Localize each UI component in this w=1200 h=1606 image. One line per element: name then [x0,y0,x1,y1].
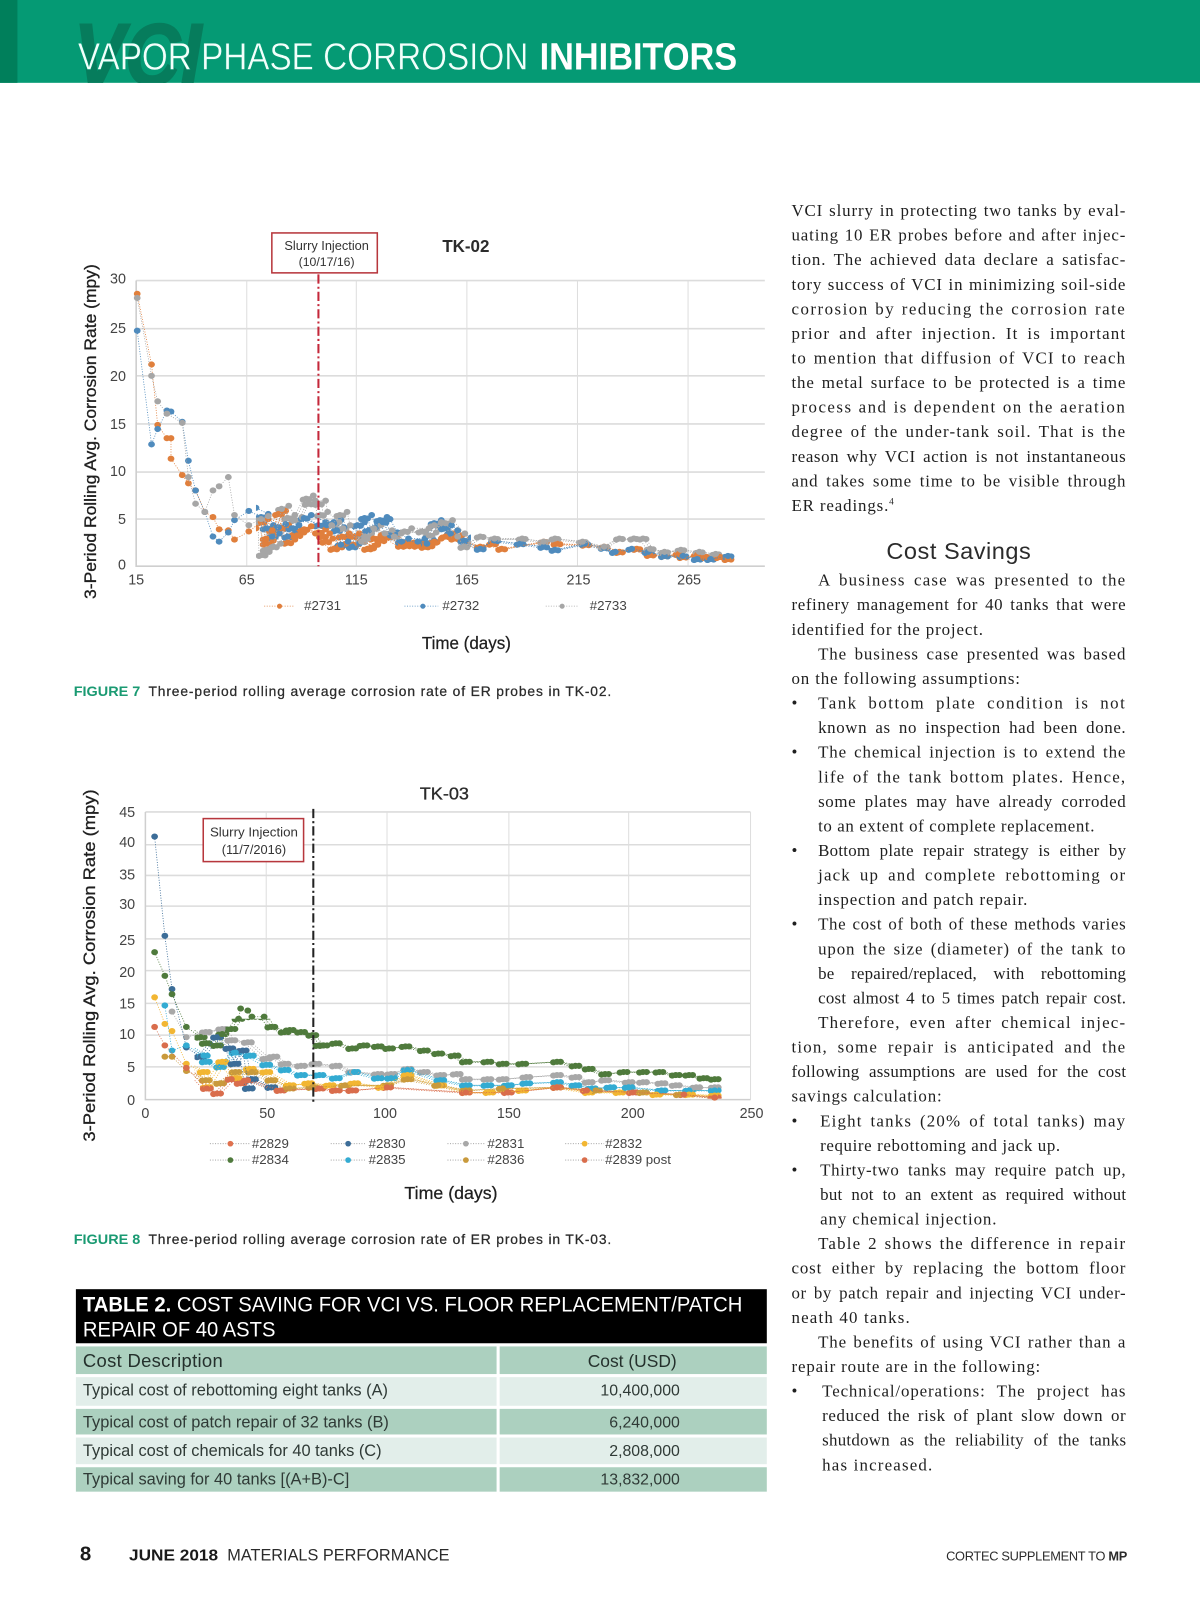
paragraphs: cost savings body: Eight tanks (20% of total tanks) may [820,1111,1126,1130]
paragraphs: cost savings body: The business case presented was based [818,644,1126,663]
series #2731 [137,294,728,559]
paragraphs: cost savings body: jack up and complete rebottoming or [818,865,1126,885]
paragraphs: cost savings body: tion, some repair is anticipated and the [791,1037,1126,1057]
x axis ticks: 250 [740,1106,764,1122]
series #2836 [165,1057,715,1098]
x axis ticks: 200 [621,1106,645,1122]
paragraphs: cost savings body: • [791,1381,798,1401]
caption: figure 7: Three-period rolling average corrosion rate of ER probes in TK-02. [148,683,611,699]
paragraph: VCI evaluation: process and is dependent on the aeration [791,397,1126,417]
header row: Cost Description [83,1350,223,1370]
paragraphs: cost savings body: • [791,1111,799,1130]
paragraphs: cost savings body: Technical/operations: The project has [822,1381,1126,1401]
paragraphs: cost savings body: any chemical injection. [820,1209,997,1229]
table heading: REPAIR OF 40 ASTS [83,1319,275,1342]
y axis ticks: 15 [119,997,135,1013]
magazine name: MATERIALS PERFORMANCE [227,1546,450,1564]
paragraphs: cost savings body: • [791,1160,798,1180]
paragraphs: cost savings body: neath 40 tanks. [791,1308,911,1327]
paragraphs: cost savings body: • [791,742,798,762]
y axis ticks: 35 [119,868,135,884]
header banner: VAPOR PHASE CORROSION [78,37,528,79]
header banner: INHIBITORS [540,37,737,79]
y axis ticks: 0 [118,557,126,573]
x axis title: Time (days) [422,633,511,653]
legend: #2836 [487,1152,524,1167]
paragraphs: cost savings body: A business case was presented to the [818,570,1126,590]
y axis ticks: 20 [119,965,135,981]
series #2832 [155,997,715,1096]
y axis ticks: 0 [127,1093,135,1109]
y axis ticks: 10 [110,464,126,480]
caption: figure 7: FIGURE 7 [74,683,141,699]
paragraphs: cost savings body: • [791,914,798,934]
caption: figure 8: FIGURE 8 [74,1231,141,1247]
x axis ticks: 265 [677,573,701,589]
y axis ticks: 25 [110,321,126,337]
series #2830 [155,837,271,1088]
callout: slurry injection [203,819,304,862]
paragraphs: cost savings body: has increased. [822,1455,933,1474]
paragraph: VCI evaluation: tion. The achieved data declare a satisfac- [791,250,1126,269]
paragraphs: cost savings body: require rebottoming and jack up. [820,1135,1061,1155]
table heading [76,1289,767,1344]
legend: #2834 [252,1152,289,1167]
legend: #2831 [487,1136,524,1151]
row: chemicals [83,1442,680,1460]
callout: slurry injection: Slurry Injection [210,825,298,840]
y axis ticks: 25 [119,933,135,949]
paragraphs: cost savings body: to an extent of complete replacement. [818,816,1095,835]
series #2829 and #2839 post [155,1027,715,1098]
chart: TK-03 corrosion rate [81,784,764,1203]
chart title: TK-03 [420,784,469,804]
supplement credit: CORTEC SUPPLEMENT TO MP [946,1548,1128,1563]
paragraph: VCI evaluation: to mention that diffusion of VCI to reach [791,348,1126,368]
paragraphs: cost savings body: Thirty-two tanks may require patch up, [820,1160,1126,1180]
x axis ticks: 0 [141,1106,149,1122]
row: saving: Typical saving for 40 tanks [(A+B)-C] [83,1471,349,1488]
table 2: cost saving [76,1289,767,1492]
x axis ticks: 100 [373,1106,397,1122]
paragraphs: cost savings body: identified for the project. [791,619,984,639]
paragraphs: cost savings body: reduced the risk of plant slow down or [822,1406,1126,1425]
y axis ticks: 5 [118,512,126,528]
callout: slurry injection: Slurry Injection [284,238,369,253]
row: chemicals: Typical cost of chemicals for 40 tanks (C) [83,1442,382,1460]
paragraphs: cost savings body: • [791,693,799,713]
row: rebottoming: 10,400,000 [600,1382,680,1399]
paragraph: VCI evaluation: and takes some time to be visible through [791,471,1126,490]
paragraphs: cost savings body: The cost of both of these methods varies [818,914,1126,934]
paragraphs: cost savings body: life of the tank bottom plates. Hence, [818,767,1126,786]
callout: slurry injection: (11/7/2016) [222,842,286,857]
paragraphs: cost savings body: shutdown as the reliability of the tanks [822,1430,1126,1450]
paragraphs: cost savings body [791,570,1126,1474]
chart title: TK-02 [442,236,489,256]
paragraphs: cost savings body: Bottom plate repair strategy is either by [818,841,1126,860]
dense marker clusters [256,496,734,564]
legend: #2829 [252,1136,289,1151]
y axis title: 3-Period Rolling Avg. Corrosion Rate (mpy) [82,264,100,599]
row: chemicals: 2,808,000 [609,1442,680,1460]
chart: TK-02 corrosion rate [82,232,765,653]
row: saving [83,1471,680,1488]
heading: cost savings: Cost Savings [886,538,1031,564]
series #2835 [165,1005,715,1090]
x axis ticks: 215 [567,573,590,589]
paragraphs: cost savings body: cost either by replacing the bottom floor [791,1258,1126,1278]
row: rebottoming [83,1382,680,1399]
x axis ticks: 165 [455,573,479,589]
callout: slurry injection [272,233,377,273]
paragraph: VCI evaluation: prior and after injection. It is important [791,324,1126,343]
paragraphs: cost savings body: cost almost 4 to 5 times patch repair cost. [818,988,1126,1008]
y axis ticks: 5 [127,1060,135,1076]
y axis ticks: 30 [110,272,126,288]
paragraphs: cost savings body: inspection and patch repair. [818,890,1028,909]
data series TK-03 [155,837,715,1098]
x axis ticks [128,573,701,589]
callout: slurry injection: (10/17/16) [299,255,355,269]
x axis ticks [141,1106,764,1122]
y axis ticks: 15 [110,417,126,433]
paragraph: VCI evaluation: reason why VCI action is not instantaneous [791,446,1126,466]
paragraphs: cost savings body: The chemical injection is to extend the [818,742,1126,762]
paragraphs: cost savings body: upon the size (diameter) of the tank to [818,939,1126,958]
paragraphs: cost savings body: • [791,841,798,860]
paragraphs: cost savings body: or by patch repair and injecting VCI under- [791,1283,1126,1302]
paragraphs: cost savings body: following assumptions are used for the cost [791,1062,1126,1081]
series #2834 [155,952,715,1079]
legend: #2732 [442,598,479,613]
series #2732 [137,331,728,559]
legend [264,598,627,613]
slurry injection marker line [317,274,319,566]
x axis ticks: 15 [128,573,144,589]
legend: #2733 [590,598,627,613]
table heading: TABLE 2. COST SAVING FOR VCI VS. FLOOR REPLACEMENT/PATCH [83,1294,742,1317]
y axis ticks: 40 [119,835,135,851]
row: saving: 13,832,000 [600,1471,680,1488]
paragraph: VCI evaluation [791,201,1126,515]
paragraphs: cost savings body: savings calculation: [791,1086,943,1106]
scattered marker clusters [256,492,471,555]
x axis ticks: 150 [497,1106,521,1122]
paragraphs: cost savings body: on the following assumptions: [791,669,1021,688]
series #2733 [137,298,716,555]
issue date: JUNE 2018 [129,1547,219,1564]
y axis ticks [110,272,126,573]
paragraphs: cost savings body: refinery management for 40 tanks that were [791,595,1126,614]
paragraphs: cost savings body: Therefore, even after chemical injec- [818,1013,1126,1032]
y axis ticks: 20 [110,369,126,385]
dense marker clusters [194,1018,722,1099]
body text column [791,201,1126,1474]
slurry injection marker line [312,809,314,1104]
legend [210,1136,671,1167]
y axis ticks [119,805,135,1109]
paragraph: VCI evaluation: ER readings.4 [791,496,895,515]
legend: #2835 [369,1152,406,1167]
paragraphs: cost savings body: Table 2 shows the difference in repair [818,1234,1126,1253]
legend: #2731 [304,598,341,613]
y axis title: 3-Period Rolling Avg. Corrosion Rate (mpy) [81,789,99,1142]
paragraphs: cost savings body: but not to an extent as required without [820,1185,1126,1204]
paragraph: VCI evaluation: corrosion by reducing the corrosion rate [791,299,1126,318]
paragraph: VCI evaluation: VCI slurry in protecting two tanks by eval- [791,201,1126,220]
paragraphs: cost savings body: repair route are in the following: [791,1357,1041,1376]
legend: #2839 post [605,1152,671,1167]
paragraphs: cost savings body: The benefits of using VCI rather than a [818,1332,1126,1352]
page number: 8 [80,1542,91,1565]
x axis title: Time (days) [404,1183,498,1203]
paragraphs: cost savings body: be repaired/replaced, with rebottoming [818,963,1126,983]
row: rebottoming: Typical cost of rebottoming eight tanks (A) [83,1382,388,1399]
legend: #2832 [605,1136,642,1151]
header banner [0,0,1200,83]
row: patch repair: Typical cost of patch repair of 32 tanks (B) [83,1413,389,1431]
data series TK-02 [137,294,728,559]
paragraph: VCI evaluation: tory success of VCI in minimizing soil-side [791,274,1126,294]
caption: figure 8: Three-period rolling average corrosion rate of ER probes in TK-03. [148,1231,611,1247]
row backgrounds [76,1346,767,1492]
row: patch repair [83,1413,680,1431]
paragraph: VCI evaluation: the metal surface to be protected is a time [791,373,1126,392]
table 2: cost saving: Cost (USD) [588,1351,677,1370]
x axis ticks: 50 [259,1106,275,1122]
series #2831 [172,1012,715,1087]
y axis ticks: 45 [119,805,135,821]
paragraphs: cost savings body: some plates may have already corroded [818,791,1126,811]
x axis ticks: 115 [345,573,368,589]
paragraphs: cost savings body: known as no inspection had been done. [818,718,1126,737]
row: patch repair: 6,240,000 [609,1413,680,1431]
paragraph: VCI evaluation: degree of the under-tank soil. That is the [791,422,1126,441]
x axis ticks: 65 [239,573,255,589]
paragraph: VCI evaluation: uating 10 ER probes before and after injec- [791,225,1126,245]
paragraphs: cost savings body: Tank bottom plate condition is not [818,693,1126,713]
y axis ticks: 10 [119,1027,135,1043]
footer [80,1542,1128,1565]
legend: #2830 [369,1136,406,1151]
y axis ticks: 30 [119,897,135,913]
